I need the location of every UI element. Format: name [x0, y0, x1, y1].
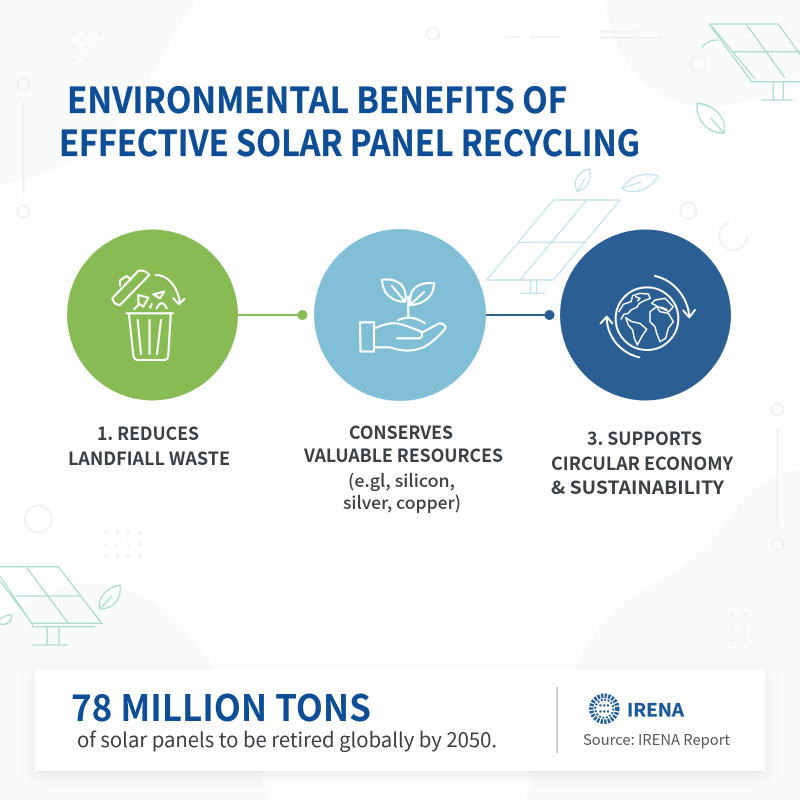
icon: solar panel bottom left [0, 567, 102, 645]
icon: leaves bottom left [0, 585, 120, 624]
icon: globe with arrows [601, 276, 695, 357]
panel: reduces landfill waste [67, 230, 238, 400]
caption 3: & SUSTAINABILITY [551, 474, 724, 500]
stat figure: 78 MILLION TONS [71, 679, 371, 732]
caption 1: LANDFIALL WASTE [68, 445, 230, 471]
decorative circles, lines and dots [18, 28, 784, 642]
caption 2: silver, copper) [343, 490, 461, 515]
icon: solar panel top right [702, 24, 800, 100]
IRENA wordmark: IRENA [627, 696, 684, 722]
icon: IRENA logo [591, 696, 617, 722]
dark blue circle [560, 230, 731, 400]
title: EFFECTIVE SOLAR PANEL RECYCLING [59, 116, 640, 167]
caption 3: 3. SUPPORTS [587, 425, 702, 451]
caption 2 [303, 419, 503, 515]
green circle [67, 230, 238, 400]
title: ENVIRONMENTAL BENEFITS OF [67, 73, 567, 124]
panel: conserves valuable resources [314, 229, 486, 401]
source note: Source: IRENA Report [583, 729, 730, 750]
caption 1 [68, 420, 230, 471]
title [59, 73, 640, 167]
icon: leaf top right [697, 103, 724, 133]
caption 1: 1. REDUCES [97, 420, 199, 446]
panel: supports circular economy [560, 230, 731, 400]
stat panel [35, 669, 765, 771]
icon: leaves centre [575, 169, 658, 192]
light blue circle [314, 229, 486, 401]
icon: trash can [112, 270, 184, 360]
connector: blue [484, 310, 554, 320]
icon: hand with sprout [360, 280, 445, 352]
stat description: of solar panels to be retired globally by 2050. [77, 724, 497, 753]
divider [556, 687, 558, 753]
caption 2: (e.gl, silicon, [348, 468, 455, 493]
icon: solar panel centre [487, 200, 620, 293]
connector: green [236, 310, 308, 320]
caption 3 [551, 425, 733, 500]
caption 2: VALUABLE RESOURCES [303, 442, 503, 468]
caption 3: CIRCULAR ECONOMY [551, 450, 733, 476]
caption 2: CONSERVES [349, 419, 453, 445]
